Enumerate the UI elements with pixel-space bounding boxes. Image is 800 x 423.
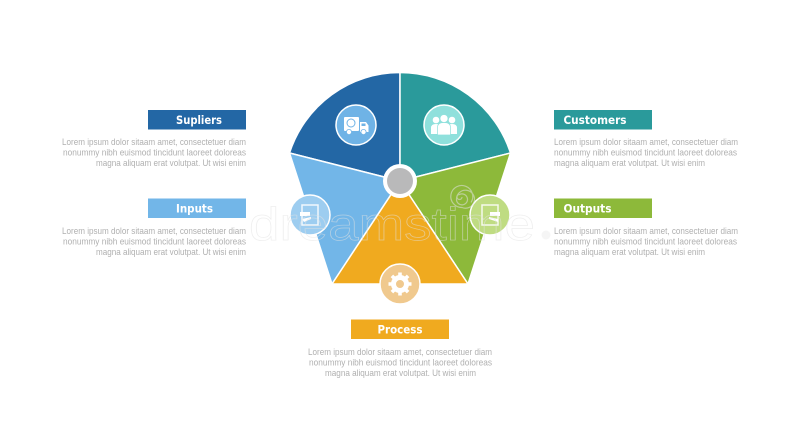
center hub (383, 164, 417, 198)
icon: truck (336, 105, 376, 145)
text block: Customers: nonummy nibh euismod tincidunt laoreet doloreas (554, 148, 737, 158)
label: Inputs: Inputs (176, 202, 213, 216)
text block: Outputs: magna aliquam erat volutpat. Ut wisi enim (554, 247, 705, 257)
label: Customers: Customers (564, 113, 627, 127)
text block: Customers (554, 137, 738, 168)
watermark (249, 186, 550, 250)
text block: Inputs: nonummy nibh euismod tincidunt laoreet doloreas (63, 236, 246, 246)
text block: Inputs: Lorem ipsum dolor sitaam amet, consectetuer diam (62, 226, 246, 236)
text block: Process (308, 347, 492, 378)
text block: Outputs: Lorem ipsum dolor sitaam amet, consectetuer diam (554, 226, 738, 236)
label: Inputs (148, 198, 246, 218)
text block: Process: magna aliquam erat volutpat. Ut wisi enim (325, 368, 476, 378)
segment: process (332, 181, 468, 284)
segment: outputs (400, 153, 510, 284)
icon: document inputs (290, 195, 330, 235)
icon: gear (380, 264, 420, 304)
text block: Supliers: nonummy nibh euismod tincidunt laoreet doloreas (63, 148, 246, 158)
text block: Process: nonummy nibh euismod tincidunt laoreet doloreas (309, 358, 492, 368)
label: Supliers: Supliers (176, 113, 222, 127)
text block: Inputs: magna aliquam erat volutpat. Ut wisi enim (96, 247, 246, 257)
label: Process (351, 320, 449, 339)
segment: inputs (290, 153, 400, 284)
text block: Outputs: nonummy nibh euismod tincidunt laoreet doloreas (554, 236, 737, 246)
watermark: dreamstime (249, 198, 535, 250)
icon: document outputs (470, 195, 510, 235)
pie chart: five segments (290, 72, 510, 284)
text block: Customers: magna aliquam erat volutpat. Ut wisi enim (554, 158, 705, 168)
text block: Supliers: Lorem ipsum dolor sitaam amet, consectetuer diam (62, 137, 246, 147)
label: Outputs: Outputs (564, 202, 612, 216)
text block: Customers: Lorem ipsum dolor sitaam amet, consectetuer diam (554, 137, 738, 147)
label: Supliers (148, 110, 246, 130)
text block: Outputs (554, 226, 738, 257)
label: Customers (554, 110, 652, 130)
text block: Inputs (62, 226, 246, 257)
text block: Supliers: magna aliquam erat volutpat. Ut wisi enim (96, 158, 246, 168)
segment: customers (400, 72, 510, 181)
segment: suppliers (290, 72, 400, 181)
text block: Supliers (62, 137, 246, 168)
text block: Process: Lorem ipsum dolor sitaam amet, consectetuer diam (308, 347, 492, 357)
label: Outputs (554, 198, 652, 218)
icon: people (424, 105, 464, 145)
label: Process: Process (378, 322, 423, 336)
